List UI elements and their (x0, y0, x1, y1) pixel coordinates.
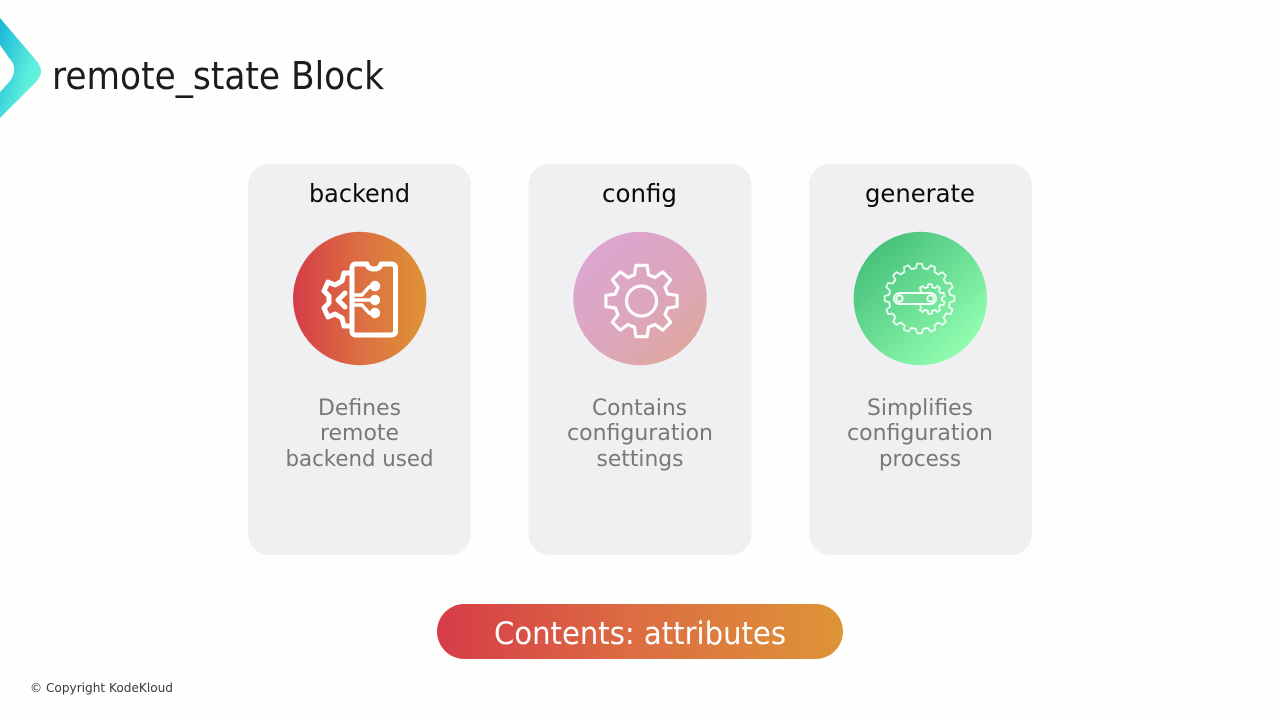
description: config (567, 395, 713, 472)
description: generate (847, 395, 993, 472)
description: generate: Simplifies (867, 395, 973, 421)
icon: crank gear (854, 232, 987, 365)
description: backend (286, 395, 434, 472)
description: backend: Defines (318, 395, 401, 421)
callout: contents attributes (437, 604, 843, 659)
heading: generate: generate (865, 179, 975, 208)
icon: chip and phone (293, 232, 426, 365)
description: backend: remote (320, 420, 399, 446)
description: backend: backend used (286, 446, 434, 472)
icon: gear (573, 232, 707, 365)
title: remote_state Block (52, 54, 384, 98)
description: config: configuration (567, 420, 713, 446)
callout: contents attributes: Contents: attributes (494, 616, 786, 652)
description: config: settings (596, 446, 684, 472)
logo chevron (0, 18, 41, 118)
footer copyright: © Copyright KodeKloud (30, 680, 173, 695)
heading: config: config (602, 179, 677, 208)
panel: generate (809, 164, 1032, 555)
description: generate: configuration (847, 420, 993, 446)
heading: backend: backend (309, 179, 410, 208)
panel: backend (248, 164, 471, 555)
panel: config (528, 164, 752, 555)
description: config: Contains (592, 395, 687, 421)
description: generate: process (879, 446, 961, 472)
